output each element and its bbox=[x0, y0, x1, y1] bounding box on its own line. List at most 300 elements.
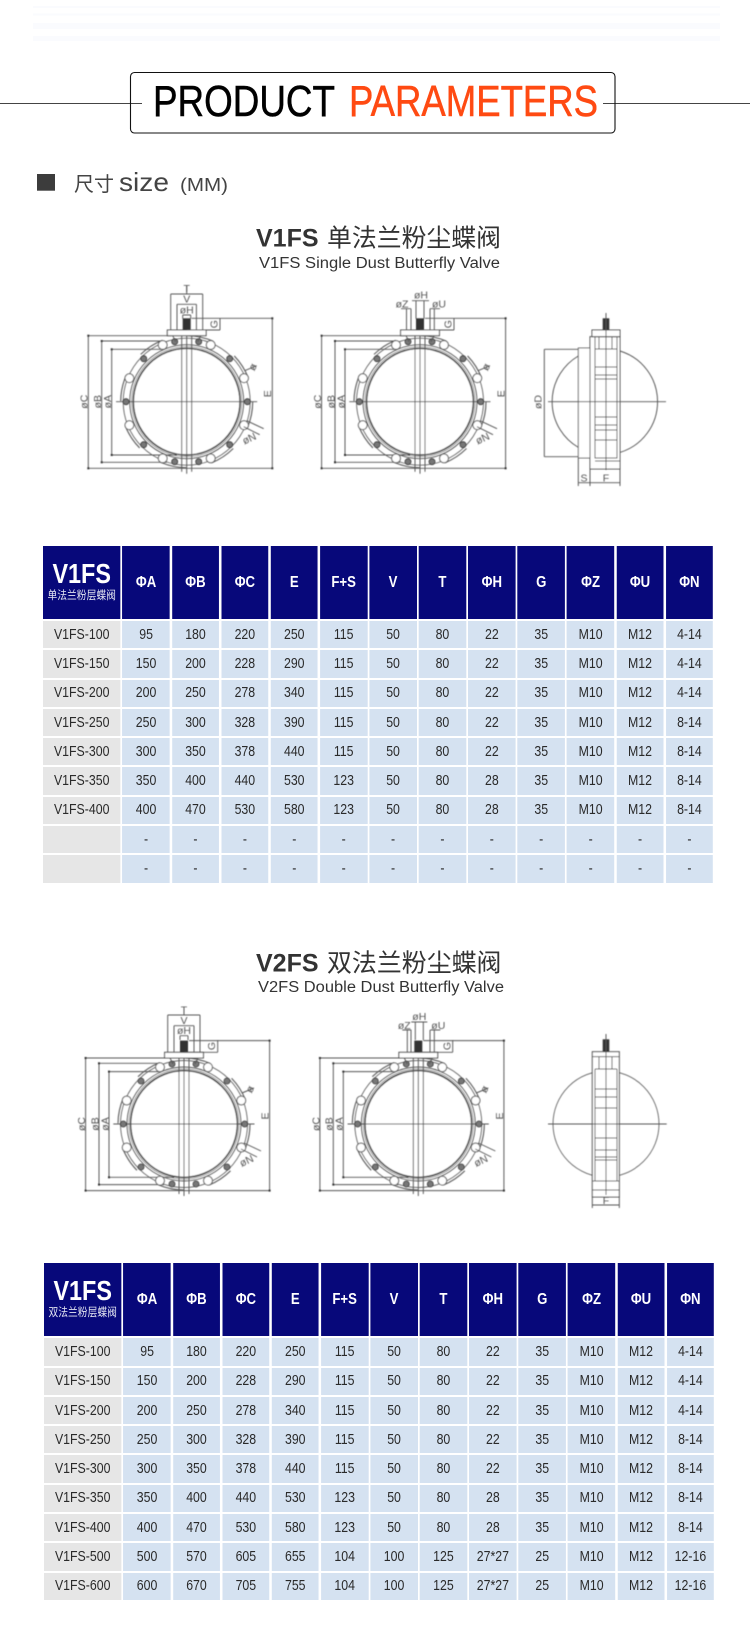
row V1FS-400: 123 bbox=[334, 802, 354, 818]
drawing: V1FS side view with D S F dimensions: S bbox=[580, 472, 588, 484]
row V1FS-250: M10 bbox=[579, 715, 603, 731]
row V1FS-200: 200 bbox=[137, 1403, 157, 1419]
row V1FS-100: M12 bbox=[629, 1344, 653, 1360]
row V1FS-600: 670 bbox=[186, 1578, 207, 1594]
row V1FS-200: 115 bbox=[335, 1403, 354, 1419]
drawing: V1FS front view with T V H dimensions: V bbox=[183, 294, 190, 306]
row V1FS-350: 440 bbox=[235, 773, 255, 789]
row V1FS-500: 27*27 bbox=[477, 1549, 509, 1565]
row V1FS-250: 328 bbox=[235, 715, 255, 731]
row V1FS-300: M12 bbox=[629, 1461, 653, 1477]
row V1FS-300: 350 bbox=[185, 744, 206, 760]
row V1FS-100: 80 bbox=[437, 1344, 450, 1360]
row V1FS-150: M10 bbox=[580, 1373, 604, 1389]
row V1FS-400: 400 bbox=[137, 1520, 157, 1536]
row V1FS-350: 35 bbox=[535, 773, 548, 789]
empty row 9: - bbox=[391, 861, 395, 877]
row V1FS-150: 290 bbox=[285, 1373, 306, 1389]
drawing: V1FS side view with D S F dimensions: øD bbox=[532, 395, 544, 409]
row V1FS-350: 80 bbox=[437, 1490, 450, 1506]
faint background texture at the top bbox=[33, 6, 720, 41]
row V1FS-300: 80 bbox=[436, 744, 450, 760]
row V1FS-600: 755 bbox=[285, 1578, 306, 1594]
table header row: ΦN bbox=[680, 1291, 701, 1308]
empty row 9: - bbox=[638, 861, 642, 877]
row V1FS-400: 80 bbox=[437, 1520, 450, 1536]
table: V1FS dimensions bbox=[43, 546, 713, 883]
row V1FS-400: 8-14 bbox=[677, 802, 702, 818]
row V1FS-150: 200 bbox=[185, 656, 206, 672]
drawing: V1FS front view with H Z U dimensions: øZ bbox=[396, 299, 409, 311]
row V1FS-400: M12 bbox=[628, 802, 652, 818]
row V1FS-300: 115 bbox=[334, 744, 354, 760]
row V1FS-300: 440 bbox=[284, 744, 305, 760]
row V1FS-600: 705 bbox=[236, 1578, 256, 1594]
row V1FS-150: M12 bbox=[628, 656, 652, 672]
table header row: ΦC bbox=[235, 574, 255, 590]
row V1FS-500: 570 bbox=[186, 1549, 207, 1565]
row V1FS-150: V1FS-150 bbox=[55, 1373, 110, 1389]
drawing: V1FS front view with H Z U dimensions: G bbox=[442, 320, 454, 328]
row V1FS-100: 180 bbox=[185, 627, 206, 643]
row V1FS-100: M12 bbox=[628, 627, 652, 643]
row V1FS-350: 35 bbox=[535, 1490, 549, 1506]
row V1FS-150: 115 bbox=[335, 1373, 354, 1389]
row V1FS-300: 8-14 bbox=[678, 1461, 703, 1477]
row V1FS-600: 25 bbox=[535, 1578, 549, 1594]
row V1FS-200: V1FS-200 bbox=[54, 685, 110, 701]
table header row: ΦB bbox=[186, 574, 206, 590]
row V1FS-150: 4-14 bbox=[677, 656, 702, 672]
row V1FS-250: 50 bbox=[386, 715, 400, 731]
row V1FS-300: 22 bbox=[486, 1461, 500, 1477]
drawing: V2FS front view with H Z U dimensions: G bbox=[441, 1042, 453, 1050]
row V1FS-300: 300 bbox=[136, 744, 157, 760]
row V1FS-150: 22 bbox=[486, 1373, 500, 1389]
row V1FS-500: 100 bbox=[384, 1549, 404, 1565]
section label: size in mm: 尺寸 bbox=[74, 174, 114, 196]
row V1FS-400: M10 bbox=[580, 1520, 604, 1536]
row V1FS-200: 278 bbox=[236, 1403, 256, 1419]
row V1FS-150: 80 bbox=[437, 1373, 450, 1389]
row V1FS-200 bbox=[43, 680, 713, 707]
row V1FS-600: 125 bbox=[433, 1578, 454, 1594]
table header row: V1FS bbox=[53, 1275, 112, 1306]
row V1FS-600: 27*27 bbox=[477, 1578, 509, 1594]
row V1FS-200: 80 bbox=[437, 1403, 450, 1419]
row V1FS-250: 115 bbox=[334, 715, 354, 731]
row V1FS-200: 278 bbox=[235, 685, 255, 701]
table header row: ΦZ bbox=[582, 1291, 601, 1308]
row V1FS-400: 28 bbox=[485, 802, 499, 818]
drawing: V2FS front view with T V H dimensions: øN bbox=[238, 1153, 256, 1170]
row V1FS-150: M10 bbox=[579, 656, 603, 672]
row V1FS-400: 530 bbox=[236, 1520, 256, 1536]
row V1FS-350: 28 bbox=[486, 1490, 500, 1506]
empty row 8: - bbox=[638, 832, 642, 848]
empty row 8: - bbox=[490, 832, 494, 848]
row V1FS-250: 35 bbox=[535, 1432, 549, 1448]
row V1FS-350: 123 bbox=[334, 773, 354, 789]
row V1FS-400: M12 bbox=[629, 1520, 653, 1536]
row V1FS-100: 250 bbox=[284, 627, 305, 643]
row V1FS-150: 80 bbox=[436, 656, 450, 672]
row V1FS-350: M10 bbox=[580, 1490, 604, 1506]
row V1FS-300: V1FS-300 bbox=[55, 1461, 110, 1477]
row V1FS-350: V1FS-350 bbox=[55, 1490, 110, 1506]
row V1FS-350: 400 bbox=[185, 773, 206, 789]
empty row 8: - bbox=[293, 832, 297, 848]
row V1FS-300: 50 bbox=[387, 1461, 401, 1477]
empty row 9: - bbox=[441, 861, 445, 877]
empty row 8: - bbox=[391, 832, 395, 848]
row V1FS-300: M12 bbox=[628, 744, 652, 760]
empty row 8: - bbox=[144, 832, 148, 848]
row V1FS-100: 220 bbox=[236, 1344, 256, 1360]
row V1FS-350 bbox=[44, 1485, 714, 1512]
heading: V2FS English name: V2FS Double Dust Butterfly Valve bbox=[258, 979, 504, 996]
row V1FS-250: 80 bbox=[436, 715, 450, 731]
row V1FS-400: 400 bbox=[136, 802, 157, 818]
row V1FS-600: 600 bbox=[137, 1578, 157, 1594]
drawing: V1FS front view with H Z U dimensions: øN bbox=[474, 431, 492, 447]
row V1FS-150: 22 bbox=[485, 656, 499, 672]
drawing: V1FS front view with T V H dimensions: T bbox=[183, 283, 190, 295]
row V1FS-300: 440 bbox=[285, 1461, 306, 1477]
row V1FS-500: 125 bbox=[433, 1549, 454, 1565]
empty row 8: - bbox=[441, 832, 445, 848]
row V1FS-400: 123 bbox=[334, 1520, 355, 1536]
row V1FS-250: 50 bbox=[387, 1432, 401, 1448]
row V1FS-200: 4-14 bbox=[678, 1403, 703, 1419]
row V1FS-200: 22 bbox=[485, 685, 499, 701]
row V1FS-200: V1FS-200 bbox=[55, 1403, 110, 1419]
row V1FS-150: 228 bbox=[236, 1373, 256, 1389]
empty row 9: - bbox=[342, 861, 346, 877]
table header row: ΦH bbox=[482, 574, 502, 590]
drawing: V2FS front view with H Z U dimensions: øA bbox=[334, 1117, 346, 1131]
row V1FS-100: 95 bbox=[140, 1344, 154, 1360]
drawing: V1FS front view with T V H dimensions: øN bbox=[241, 431, 258, 447]
row V1FS-150: 290 bbox=[284, 656, 305, 672]
section label: size in mm: (MM) bbox=[180, 175, 228, 195]
row V1FS-100: 220 bbox=[235, 627, 255, 643]
row V1FS-100: 22 bbox=[485, 627, 499, 643]
row V1FS-150 bbox=[44, 1368, 714, 1395]
row V1FS-250: 80 bbox=[437, 1432, 450, 1448]
table header row: V bbox=[389, 574, 398, 590]
row V1FS-250: V1FS-250 bbox=[55, 1432, 110, 1448]
row V1FS-600 bbox=[44, 1573, 714, 1600]
drawing: V1FS front view with H Z U dimensions: øB bbox=[325, 395, 337, 408]
row V1FS-300: 378 bbox=[235, 744, 255, 760]
empty row 9 bbox=[43, 855, 713, 883]
row V1FS-300: M10 bbox=[580, 1461, 604, 1477]
row V1FS-400 bbox=[43, 797, 713, 824]
row V1FS-300 bbox=[43, 738, 713, 765]
row V1FS-300: 35 bbox=[535, 744, 548, 760]
row V1FS-200: 35 bbox=[535, 1403, 549, 1419]
row V1FS-300: 35 bbox=[535, 1461, 549, 1477]
row V1FS-300 bbox=[44, 1455, 714, 1483]
drawing: V2FS front view with T V H dimensions: T bbox=[181, 1004, 188, 1016]
row V1FS-100: 50 bbox=[386, 627, 400, 643]
row V1FS-200: 4-14 bbox=[677, 685, 702, 701]
heading: V2FS Chinese name: V2FS bbox=[256, 950, 319, 978]
row V1FS-400: V1FS-400 bbox=[54, 802, 110, 818]
row V1FS-150: 50 bbox=[387, 1373, 401, 1389]
row V1FS-400: 8-14 bbox=[678, 1520, 703, 1536]
row V1FS-250: 8-14 bbox=[677, 715, 702, 731]
row V1FS-200 bbox=[44, 1397, 714, 1424]
drawing: V2FS front view with H Z U dimensions: E bbox=[494, 1112, 506, 1120]
row V1FS-100: 115 bbox=[335, 1344, 354, 1360]
heading: V1FS English name: V1FS Single Dust Butterfly Valve bbox=[259, 255, 500, 272]
row V1FS-100: 22 bbox=[486, 1344, 500, 1360]
table header row: ΦZ bbox=[581, 574, 600, 590]
row V1FS-150: 4-14 bbox=[678, 1373, 703, 1389]
row V1FS-250: 22 bbox=[486, 1432, 500, 1448]
row V1FS-400: V1FS-400 bbox=[55, 1520, 110, 1536]
row V1FS-100: 95 bbox=[140, 627, 153, 643]
table header row: T bbox=[439, 574, 447, 590]
row V1FS-500: V1FS-500 bbox=[55, 1549, 110, 1565]
row V1FS-250: V1FS-250 bbox=[54, 715, 110, 731]
row V1FS-600: M12 bbox=[629, 1578, 653, 1594]
row V1FS-400: 530 bbox=[235, 802, 255, 818]
drawing: V1FS front view with T V H dimensions: øA bbox=[102, 395, 114, 408]
title banner: PRODUCT bbox=[153, 78, 335, 126]
row V1FS-350: 8-14 bbox=[677, 773, 702, 789]
row V1FS-350: 28 bbox=[485, 773, 499, 789]
row V1FS-350: 400 bbox=[186, 1490, 207, 1506]
row V1FS-300: 50 bbox=[386, 744, 400, 760]
empty row 9: - bbox=[490, 861, 494, 877]
row V1FS-100: 250 bbox=[285, 1344, 306, 1360]
row V1FS-300: M10 bbox=[579, 744, 603, 760]
row V1FS-400: 35 bbox=[535, 1520, 549, 1536]
row V1FS-200: 250 bbox=[186, 1403, 207, 1419]
row V1FS-500: M10 bbox=[580, 1549, 604, 1565]
row V1FS-350: 350 bbox=[137, 1490, 157, 1506]
table header row: 双法兰粉层蝶阀 bbox=[48, 1307, 117, 1319]
empty row 8: - bbox=[539, 832, 544, 848]
row V1FS-500: 500 bbox=[137, 1549, 157, 1565]
row V1FS-100: 4-14 bbox=[677, 627, 702, 643]
row V1FS-250: 390 bbox=[284, 715, 305, 731]
row V1FS-200: M12 bbox=[629, 1403, 653, 1419]
row V1FS-100: 35 bbox=[535, 1344, 549, 1360]
table header row: ΦN bbox=[680, 574, 700, 590]
row V1FS-200: 340 bbox=[284, 685, 305, 701]
table header row: E bbox=[290, 574, 299, 590]
table header row: V1FS bbox=[53, 558, 111, 589]
drawing: V2FS front view with H Z U dimensions: øB bbox=[324, 1117, 336, 1131]
row V1FS-250: M12 bbox=[628, 715, 652, 731]
row V1FS-250: 8-14 bbox=[678, 1432, 703, 1448]
row V1FS-500: 104 bbox=[334, 1549, 355, 1565]
row V1FS-200: 80 bbox=[436, 685, 450, 701]
row V1FS-350: 530 bbox=[284, 773, 305, 789]
row V1FS-500: 25 bbox=[535, 1549, 549, 1565]
heading: V1FS Chinese name: V1FS bbox=[256, 225, 319, 253]
row V1FS-100: M10 bbox=[579, 627, 603, 643]
row V1FS-200: 22 bbox=[486, 1403, 500, 1419]
row V1FS-150: 150 bbox=[136, 656, 157, 672]
row V1FS-400 bbox=[44, 1514, 714, 1541]
row V1FS-250: 390 bbox=[285, 1432, 306, 1448]
row V1FS-200: M10 bbox=[580, 1403, 604, 1419]
row V1FS-400: 28 bbox=[486, 1520, 500, 1536]
row V1FS-350: 440 bbox=[236, 1490, 256, 1506]
drawing: V1FS front view with H Z U dimensions: øU bbox=[432, 299, 446, 311]
table header row: ΦC bbox=[236, 1291, 256, 1308]
table header row: ΦA bbox=[136, 574, 157, 590]
row V1FS-300: V1FS-300 bbox=[54, 744, 110, 760]
table header row: 单法兰粉层蝶阀 bbox=[48, 590, 116, 602]
empty row 9: - bbox=[688, 861, 692, 877]
drawing: V2FS front view with H Z U dimensions: øU bbox=[431, 1020, 445, 1032]
row V1FS-200: 340 bbox=[285, 1403, 306, 1419]
row V1FS-100: 50 bbox=[387, 1344, 401, 1360]
empty row 9: - bbox=[243, 861, 247, 877]
empty row 9: - bbox=[194, 861, 198, 877]
drawing: V1FS front view with T V H dimensions: G bbox=[209, 320, 221, 328]
empty row 8: - bbox=[342, 832, 346, 848]
row V1FS-400: 35 bbox=[535, 802, 548, 818]
row V1FS-250: 250 bbox=[137, 1432, 157, 1448]
row V1FS-200: 200 bbox=[136, 685, 157, 701]
row V1FS-400: 50 bbox=[387, 1520, 401, 1536]
row V1FS-150: 35 bbox=[535, 656, 548, 672]
row V1FS-350: M12 bbox=[629, 1490, 653, 1506]
row V1FS-250: M10 bbox=[580, 1432, 604, 1448]
row V1FS-500 bbox=[44, 1543, 714, 1571]
row V1FS-100: 80 bbox=[436, 627, 450, 643]
row V1FS-400: 80 bbox=[436, 802, 450, 818]
row V1FS-350 bbox=[43, 767, 713, 795]
row V1FS-250: M12 bbox=[629, 1432, 653, 1448]
section marker square bbox=[37, 174, 55, 191]
title banner: PARAMETERS bbox=[349, 78, 598, 126]
row V1FS-200: 115 bbox=[334, 685, 354, 701]
table header row: ΦH bbox=[483, 1291, 503, 1308]
drawing: V1FS front view with H Z U dimensions: øC bbox=[312, 394, 324, 409]
drawing: V2FS front view with H Z U dimensions bbox=[310, 1011, 506, 1196]
drawing: V2FS front view with H Z U dimensions: øC bbox=[310, 1117, 322, 1131]
drawing: V2FS front view with T V H dimensions: G bbox=[206, 1042, 218, 1050]
row V1FS-400: 470 bbox=[185, 802, 206, 818]
drawing: V1FS front view with H Z U dimensions: ø bbox=[480, 361, 493, 373]
table header row: F+S bbox=[332, 1291, 357, 1308]
row V1FS-150: V1FS-150 bbox=[54, 656, 110, 672]
row V1FS-350: 80 bbox=[436, 773, 450, 789]
table header row: ΦU bbox=[631, 1291, 651, 1308]
row V1FS-150: 150 bbox=[137, 1373, 157, 1389]
table header row: G bbox=[537, 1291, 547, 1308]
row V1FS-300: 115 bbox=[335, 1461, 354, 1477]
row V1FS-250: 300 bbox=[186, 1432, 207, 1448]
row V1FS-400: 580 bbox=[285, 1520, 306, 1536]
row V1FS-300: 300 bbox=[137, 1461, 157, 1477]
drawing: V1FS front view with H Z U dimensions bbox=[312, 290, 508, 474]
drawing: V1FS side view with D S F dimensions: F bbox=[603, 472, 609, 484]
row V1FS-200: 50 bbox=[387, 1403, 401, 1419]
row V1FS-600: V1FS-600 bbox=[55, 1578, 110, 1594]
row V1FS-400: 580 bbox=[284, 802, 305, 818]
row V1FS-600: 12-16 bbox=[675, 1578, 706, 1594]
table header row: T bbox=[439, 1291, 447, 1308]
row V1FS-100: V1FS-100 bbox=[54, 627, 110, 643]
row V1FS-250: 328 bbox=[236, 1432, 256, 1448]
empty row 8 bbox=[43, 826, 713, 853]
table header row: E bbox=[291, 1291, 300, 1308]
drawing: V2FS front view with T V H dimensions bbox=[76, 1004, 272, 1196]
drawing: V2FS front view with H Z U dimensions: øZ bbox=[398, 1020, 411, 1032]
empty row 8: - bbox=[688, 832, 692, 848]
drawing: V1FS front view with T V H dimensions bbox=[79, 283, 274, 474]
drawing: V2FS side view with F dimension: F bbox=[603, 1195, 609, 1207]
row V1FS-150: 115 bbox=[334, 656, 354, 672]
row V1FS-350: 50 bbox=[387, 1490, 401, 1506]
row V1FS-100: V1FS-100 bbox=[55, 1344, 110, 1360]
empty row 9: - bbox=[539, 861, 544, 877]
drawing: V1FS front view with T V H dimensions: øC bbox=[79, 394, 91, 409]
drawing: V2FS front view with T V H dimensions: øB bbox=[89, 1117, 101, 1131]
row V1FS-300: 350 bbox=[186, 1461, 207, 1477]
drawing: V2FS front view with T V H dimensions: ø bbox=[244, 1083, 257, 1095]
drawing: V1FS front view with H Z U dimensions: øH bbox=[414, 290, 428, 302]
drawing: V1FS front view with T V H dimensions: øB bbox=[92, 395, 104, 408]
drawing: V1FS side view with D S F dimensions bbox=[532, 313, 666, 486]
row V1FS-250: 300 bbox=[185, 715, 206, 731]
table header row bbox=[43, 546, 713, 619]
row V1FS-300: 378 bbox=[236, 1461, 256, 1477]
row V1FS-500: 605 bbox=[236, 1549, 256, 1565]
row V1FS-150: M12 bbox=[629, 1373, 653, 1389]
table: V2FS dimensions bbox=[44, 1263, 714, 1600]
section label: size in mm: size bbox=[119, 167, 169, 197]
row V1FS-400: M10 bbox=[579, 802, 603, 818]
row V1FS-200: 250 bbox=[185, 685, 206, 701]
empty row 9: - bbox=[144, 861, 148, 877]
table header row: F+S bbox=[332, 574, 356, 590]
row V1FS-350: 350 bbox=[136, 773, 157, 789]
empty row 8: - bbox=[194, 832, 198, 848]
row V1FS-300: 80 bbox=[437, 1461, 450, 1477]
row V1FS-350: 8-14 bbox=[678, 1490, 703, 1506]
row V1FS-350: 50 bbox=[386, 773, 400, 789]
drawing: V1FS front view with T V H dimensions: E bbox=[262, 390, 274, 397]
row V1FS-400: 50 bbox=[386, 802, 400, 818]
drawing: V2FS front view with T V H dimensions: øH bbox=[177, 1025, 191, 1037]
row V1FS-200: 50 bbox=[386, 685, 400, 701]
row V1FS-350: 530 bbox=[285, 1490, 306, 1506]
title banner bbox=[0, 72, 750, 133]
drawing: V2FS side view with F dimension bbox=[548, 1034, 667, 1208]
table header row: ΦB bbox=[186, 1291, 207, 1308]
row V1FS-150 bbox=[43, 650, 713, 678]
drawing: V2FS front view with H Z U dimensions: ø bbox=[478, 1083, 492, 1095]
row V1FS-600: M10 bbox=[580, 1578, 604, 1594]
row V1FS-500: M12 bbox=[629, 1549, 653, 1565]
row V1FS-150: 35 bbox=[535, 1373, 549, 1389]
row V1FS-250: 35 bbox=[535, 715, 548, 731]
row V1FS-600: 100 bbox=[384, 1578, 404, 1594]
row V1FS-350: M12 bbox=[628, 773, 652, 789]
drawing: V2FS front view with T V H dimensions: øA bbox=[99, 1117, 111, 1131]
row V1FS-100: M10 bbox=[580, 1344, 604, 1360]
